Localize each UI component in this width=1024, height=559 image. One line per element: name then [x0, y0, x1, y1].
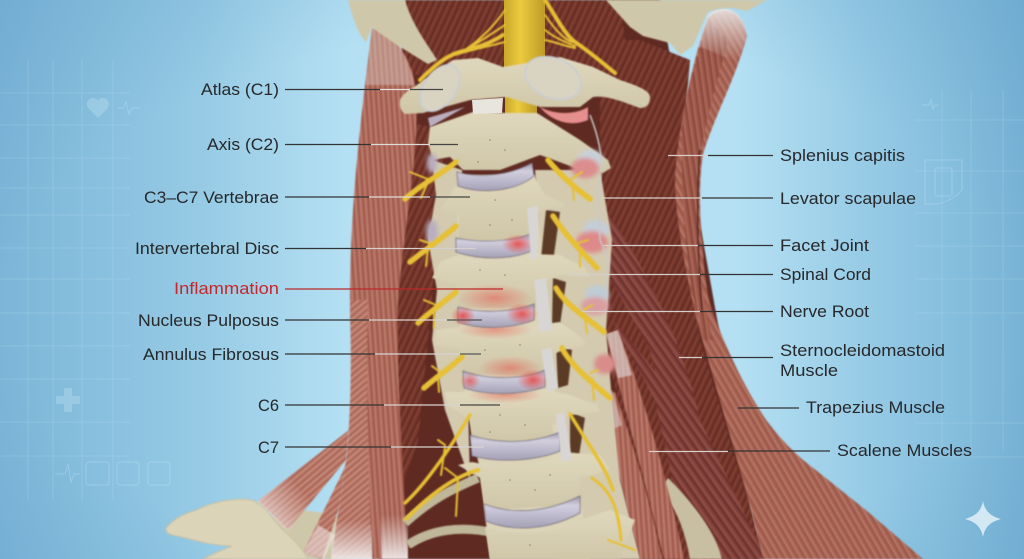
- axis C2: [428, 112, 611, 173]
- label: Trapezius Muscle: Trapezius Muscle: [806, 399, 945, 417]
- left lower trapezius fan: [257, 430, 349, 559]
- left sternocleidomastoid muscle: [331, 28, 417, 559]
- labels right: [570, 147, 972, 460]
- rib arcs: [405, 478, 495, 545]
- right lower bone: [660, 478, 722, 559]
- lateral bone columns: [428, 160, 470, 480]
- right scalene muscle strip: [598, 330, 684, 559]
- vertebra C4: [432, 254, 590, 308]
- right dark muscle mass: [600, 40, 766, 559]
- inflammation patches on bone: [457, 284, 543, 403]
- right trapezius and sternocleidomastoid band: [675, 9, 923, 559]
- vertebra C7: [458, 452, 610, 510]
- label: Facet Joint: Facet Joint: [780, 237, 869, 255]
- label: C7: C7: [258, 439, 279, 457]
- label: Annulus Fibrosus: Annulus Fibrosus: [143, 346, 279, 364]
- label: Atlas (C1): Atlas (C1): [201, 81, 279, 99]
- disc C4-C5: [458, 304, 534, 327]
- vertebral column bodies: [432, 173, 635, 559]
- yellow nerve roots: [405, 0, 635, 550]
- intervertebral discs: [456, 163, 580, 528]
- label: C6: C6: [258, 397, 279, 415]
- bone speckles: [477, 139, 551, 546]
- label: Intervertebral Disc: Intervertebral Disc: [135, 240, 279, 258]
- faint medical icons: [55, 98, 962, 485]
- label: Nucleus Pulposus: Nucleus Pulposus: [138, 312, 279, 330]
- facet joints: [426, 150, 616, 374]
- atlas facet right: [519, 49, 587, 107]
- inflammation patches on discs: [451, 234, 549, 391]
- atlas C1: [400, 49, 650, 118]
- vertebra T1: [485, 510, 635, 559]
- atlas facet left: [412, 58, 468, 118]
- skull base left: [348, 0, 437, 64]
- disc C3-C4: [456, 234, 531, 258]
- label: Splenius capitis: Splenius capitis: [780, 147, 905, 165]
- label: Levator scapulae: Levator scapulae: [780, 190, 916, 208]
- label: Axis (C2): Axis (C2): [207, 136, 279, 154]
- central bone column: [457, 175, 590, 559]
- white ligament strips: [527, 115, 608, 462]
- disc C7-T1: [484, 496, 580, 528]
- label: Nerve Root: Nerve Root: [780, 303, 869, 321]
- disc C6-C7: [470, 432, 560, 460]
- dark gaps beside spine: [541, 210, 585, 462]
- C1-C2 joints: [428, 107, 588, 127]
- disc C5-C6: [463, 370, 545, 394]
- bone behind lower left fan: [270, 511, 350, 559]
- left clavicle bone: [166, 499, 308, 559]
- background grid: [0, 60, 1024, 500]
- spinal cord: [504, 0, 596, 508]
- vertebra C3: [440, 173, 564, 240]
- label: C3–C7 Vertebrae: C3–C7 Vertebrae: [144, 189, 279, 207]
- label: Sternocleidomastoid Muscle: Sternocleidomastoid: [780, 342, 945, 360]
- vertebra C5: [434, 322, 586, 375]
- sparkle icon: [965, 501, 1001, 537]
- disc C2-C3: [457, 163, 534, 191]
- label: Spinal Cord: Spinal Cord: [780, 266, 871, 284]
- label: Sternocleidomastoid Muscle: [679, 342, 945, 380]
- label: Scalene Muscles: Scalene Muscles: [837, 442, 972, 460]
- deep muscles behind spine: [370, 0, 760, 559]
- ligament under atlas: [472, 98, 503, 114]
- labels left: [135, 81, 503, 457]
- label: Inflammation: Inflammation: [174, 280, 279, 298]
- skull base right: [606, 0, 767, 55]
- vertebra C6: [445, 390, 600, 442]
- label: Sternocleidomastoid Muscle: Muscle: [780, 362, 838, 380]
